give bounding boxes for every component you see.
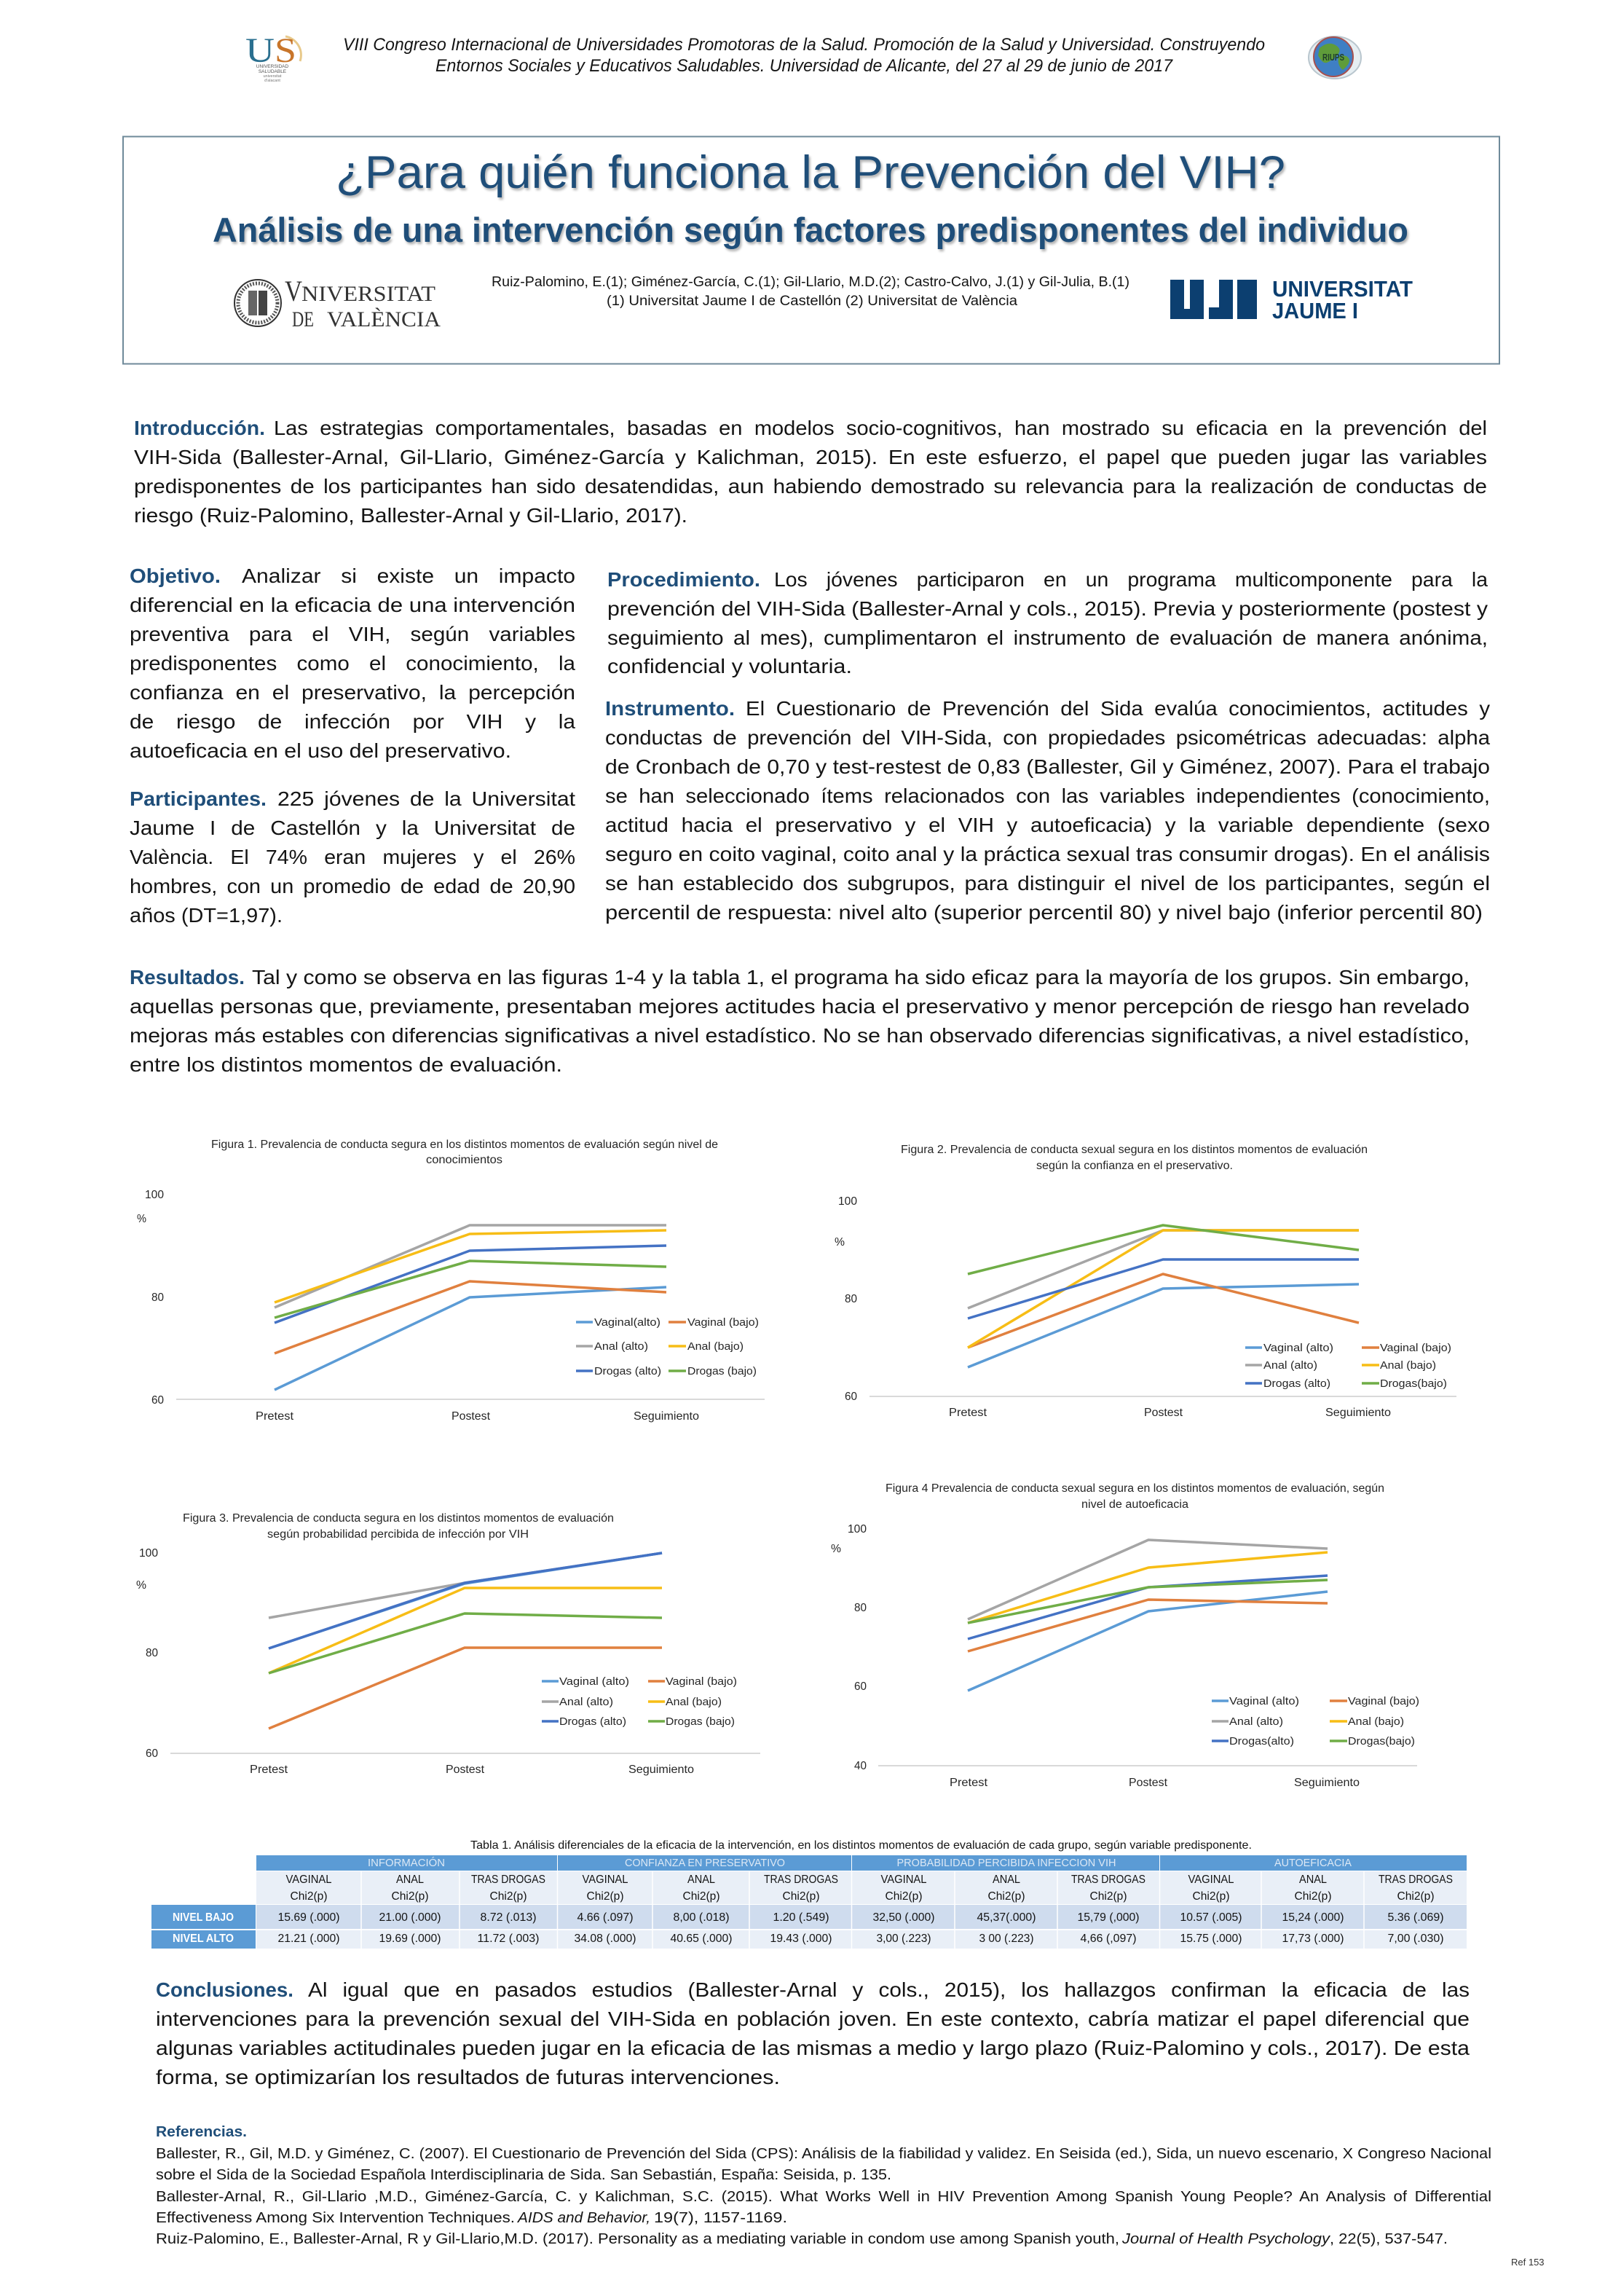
references list: sobre el Sida de la Sociedad Española Interdisciplinaria de Sida. San Sebastián, España: Seisida, p. 135. [156,2167,891,2183]
title: ¿Para quién funciona la Prevención del VIH? [336,147,1285,198]
x axis labels [950,1777,1360,1789]
table column headers: Chi2(p) [1089,1890,1127,1903]
legend: Vaginal (alto) [1263,1342,1333,1354]
table row: nivel bajo: 32,50 (.000) [872,1911,935,1924]
table group headers [368,1857,1352,1869]
x axis labels: Seguimiento [1325,1407,1391,1419]
chart: figura 4 [831,1482,1419,1789]
icon: Universidad Saludable logo [245,31,301,83]
legend: Anal (bajo) [1348,1715,1404,1728]
references list: AIDS and Behavior, [517,2210,650,2226]
table column headers: TRAS DROGAS [471,1874,545,1886]
y axis labels: 60 [854,1680,867,1693]
references list [156,2146,1491,2247]
subtitle: Análisis de una intervención según factores predisponentes del individuo [213,211,1408,249]
text block: conclusiones: Conclusiones. [156,1978,293,2001]
y axis labels: 80 [845,1293,857,1305]
legend: Drogas (alto) [559,1715,626,1728]
text block: resultados: entre los distintos momentos de evaluación. [130,1053,562,1076]
legend: Drogas(alto) [1229,1735,1294,1747]
text block: introducción: Introducción. [134,417,265,439]
text block: objetivo: Analizar si existe un impacto [242,565,575,587]
icon: Universitat de València logo: V [285,275,302,307]
y axis labels: 80 [854,1602,867,1614]
y axis labels [136,1547,158,1760]
text block: resultados: aquellas personas que, previamente, presentaban mejores actitudes hacia el preservativo y menor percepción de riesgo han revelado [130,995,1470,1018]
table row: nivel alto [173,1933,1443,1945]
text block: objetivo: preventiva para el VIH, según variables [130,623,575,645]
icon: Universidad Saludable logo: UNIVERSIDAD [256,64,289,69]
chart: figura 3 [136,1512,760,1776]
table column headers: Chi2(p) [683,1890,719,1903]
chart title [183,1512,614,1541]
table column headers: Chi2(p) [987,1890,1025,1903]
authors: Ruiz-Palomino, E.(1); Giménez-García, C.(1); Gil-Llario, M.D.(2); Castro-Calvo, J.(1) y Gil-Julia, B.(1) [492,275,1129,290]
table caption: Tabla 1. Análisis diferenciales de la eficacia de la intervención, en los distintos momentos de evaluación de cada grupo, según variable predisponente. [470,1839,1252,1852]
text block: introducción: predisponentes de los participantes han sido desatendidas, aun habiendo demostrado su relevancia para la realización de conductas de [134,475,1487,498]
references list: Ballester, R., Gil, M.D. y Giménez, C. (2007). El Cuestionario de Prevención del Sida (CPS): Análisis de la fiabilidad y validez. En Seisida (ed.), Sida, un nuevo escenario, X Congreso Nacional [156,2146,1491,2162]
legend: Drogas (alto) [594,1365,661,1377]
text block: introducción: VIH-Sida (Ballester-Arnal, Gil-Llario, Giménez-García y Kalichman, 2015). En este esfuerzo, el papel que pueden jugar las variables [134,446,1487,468]
table group headers: INFORMACIÓN [368,1857,445,1869]
text block: procedimiento: confidencial y voluntaria. [607,655,852,677]
table row: nivel bajo: 21.00 (.000) [379,1911,441,1924]
y axis labels: % [136,1579,146,1592]
legend: Vaginal (bajo) [687,1316,759,1329]
legend: Drogas(bajo) [1348,1735,1415,1747]
icon: Universitat Jaume I logo [1170,276,1413,323]
chart title: según probabilidad percibida de infección por VIH [267,1528,529,1541]
reference number: Ref 153 [1511,2257,1545,2268]
chart title: Figura 1. Prevalencia de conducta segura en los distintos momentos de evaluación según nivel de [211,1139,718,1151]
x axis labels: Pretest [950,1777,988,1789]
table column headers: ANAL [687,1874,715,1886]
y axis labels: % [831,1543,841,1555]
legend: Anal (alto) [594,1340,648,1353]
x axis labels: Postest [446,1764,485,1776]
table column headers: Chi2(p) [782,1890,820,1903]
text block: procedimiento [607,568,1488,677]
table row: nivel alto: 17,73 (.000) [1282,1933,1344,1945]
references heading: Referencias. [156,2124,247,2140]
text block: instrumento: Instrumento. [605,697,735,720]
text block: objetivo: autoeficacia en el uso del preservativo. [130,739,511,762]
legend: Drogas (bajo) [687,1365,757,1377]
text block: resultados [130,966,1470,1076]
table column headers: ANAL [1299,1874,1327,1886]
x axis labels: Postest [451,1410,491,1423]
text block: participantes: Participantes. [130,787,267,810]
text block: resultados: Tal y como se observa en las figuras 1-4 y la tabla 1, el programa ha sido eficaz para la mayoría de los grupos. Sin embargo, [252,966,1470,988]
chart title: Figura 2. Prevalencia de conducta sexual segura en los distintos momentos de evaluación [901,1144,1368,1156]
references list: Ruiz-Palomino, E., Ballester-Arnal, R y Gil-Llario,M.D. (2017). Personality as a mediating variable in condom use among Spanish youth, [156,2231,1119,2247]
icon: Universidad Saludable logo: universitat [263,74,282,79]
table column headers: Chi2(p) [1295,1890,1331,1903]
chart title: Figura 4 Prevalencia de conducta sexual segura en los distintos momentos de evaluación, según [886,1482,1384,1495]
legend: Anal (alto) [559,1696,613,1708]
x axis labels: Seguimiento [634,1410,699,1423]
text block: instrumento: seguro en coito vaginal, coito anal y la práctica sexual tras consumir drogas). En el análisis [605,843,1490,865]
table row: nivel bajo: 8.72 (.013) [481,1911,536,1924]
text block: introducción: Las estrategias comportamentales, basadas en modelos socio-cognitivos, han mostrado su eficacia en la prevención del [274,417,1487,439]
table row: nivel bajo: 4.66 (.097) [577,1911,634,1924]
table column headers: Chi2(p) [290,1890,328,1903]
references list: Ballester-Arnal, R., Gil-Llario ,M.D., Giménez-García, C. y Kalichman, S.C. (2015). What Works Well in HIV Prevention Among Spanish Young People? An Analysis of Differential [156,2189,1491,2205]
chart: figura 1 [137,1139,765,1423]
legend: Drogas (alto) [1263,1377,1330,1390]
references list: , 22(5), 537-547. [1330,2231,1448,2247]
legend: Anal (bajo) [1380,1359,1436,1372]
table row: nivel alto: 15.75 (.000) [1180,1933,1242,1945]
table row: nivel alto: 3,00 (.223) [877,1933,931,1945]
y axis labels [835,1195,857,1403]
text block: objetivo: diferencial en la eficacia de una intervención [130,594,575,616]
text block: participantes: Jaume I de Castellón y la Universitat de [130,817,575,839]
authors: (1) Universitat Jaume I de Castellón (2) Universitat de València [607,294,1017,309]
text block: introducción: riesgo (Ruiz-Palomino, Ballester-Arnal y Gil-Llario, 2017). [134,504,687,527]
icon: Universidad Saludable logo: SALUDABLE [259,69,287,74]
text block: participantes [130,787,575,927]
icon: Universitat de València logo [234,275,441,331]
legend [542,1675,737,1728]
references list: Journal of Health Psychology [1121,2231,1330,2247]
icon: Universitat de València logo: VALÈNCIA [327,307,441,331]
text block: instrumento: actitud hacia el preservativo y el VIH y autoeficacia) y la variable dependiente (sexo [605,814,1490,836]
table column headers: Chi2(p) [392,1890,428,1903]
icon: Universitat Jaume I logo: UNIVERSITAT [1272,276,1413,302]
legend: Vaginal (bajo) [1380,1342,1451,1354]
y axis labels: 80 [146,1647,158,1659]
text block: instrumento: conductas de prevención del VIH-Sida, con propiedades psicométricas adecuadas: alpha [605,726,1490,749]
text block: procedimiento: Los jóvenes participaron en un programa multicomponente para la [774,568,1488,591]
table column headers: ANAL [396,1874,424,1886]
congress header text [343,35,1265,76]
chart: figura 2 [835,1144,1456,1419]
table column headers: TRAS DROGAS [764,1874,838,1886]
y axis labels: 100 [838,1195,857,1208]
legend [1245,1342,1451,1390]
y axis labels: 100 [848,1523,867,1536]
table row: nivel alto: 7,00 (.030) [1388,1933,1443,1945]
table row: nivel alto: 19.43 (.000) [770,1933,832,1945]
legend: Anal (alto) [1229,1715,1283,1728]
table column headers: VAGINAL [1188,1874,1234,1886]
table row: nivel bajo: 15,24 (.000) [1282,1911,1344,1924]
table row: nivel bajo: 15,79 (,000) [1078,1911,1139,1924]
text block: procedimiento: seguimiento al mes), cumplimentaron el instrumento de evaluación de manera anónima, [607,626,1488,649]
text block: participantes: años (DT=1,97). [130,904,283,927]
legend: Anal (alto) [1263,1359,1317,1372]
table row: nivel alto: 4,66 (,097) [1081,1933,1136,1945]
x axis labels: Pretest [250,1764,288,1776]
table group headers: PROBABILIDAD PERCIBIDA INFECCION VIH [897,1857,1116,1869]
icon: Universitat de València logo: DE [292,307,314,331]
chart title [901,1144,1368,1172]
icon: RIUPS globe logo: RIUPS [1322,52,1344,63]
table column headers [285,1874,1453,1903]
y axis labels: 100 [139,1547,158,1560]
x axis labels [250,1764,694,1776]
table column headers: Chi2(p) [489,1890,527,1903]
text block: procedimiento: Procedimiento. [607,568,760,591]
text block: instrumento: se han establecido dos subgrupos, para distinguir el nivel de los participantes, según el [605,872,1490,895]
y axis labels: 100 [145,1189,164,1201]
table group headers: CONFIANZA EN PRESERVATIVO [625,1857,785,1869]
x axis labels [256,1410,699,1423]
legend: Vaginal(alto) [594,1316,660,1329]
table row: nivel alto: 19.69 (.000) [379,1933,441,1945]
text block: instrumento: El Cuestionario de Prevención del Sida evalúa conocimientos, actitudes y [746,697,1490,720]
legend: Vaginal (alto) [1229,1695,1299,1707]
text block: resultados: mejoras más estables con diferencias significativas a nivel estadístico. No se han observado diferencias significativas, a nivel estadístico, [130,1024,1470,1047]
table column headers: Chi2(p) [1397,1890,1435,1903]
y axis labels: 60 [151,1394,164,1407]
table row: nivel bajo: 5.36 (.069) [1388,1911,1443,1924]
text block: instrumento: se han seleccionado ítems relacionados con las variables independientes (conocimiento, [605,785,1490,807]
text block: conclusiones: intervenciones para la prevención sexual del VIH-Sida en población joven. En este contexto, cabría matizar el papel diferencial que [156,2008,1470,2030]
text block: objetivo: confianza en el preservativo, la percepción [130,681,575,704]
chart title: conocimientos [426,1154,502,1166]
table row: nivel alto: NIVEL ALTO [173,1933,234,1945]
chart title: nivel de autoeficacia [1081,1498,1188,1511]
references list: 19(7), 1157-1169. [654,2210,787,2226]
chart title [211,1139,718,1166]
congress header text: Entornos Sociales y Educativos Saludables. Universidad de Alicante, del 27 al 29 de junio de 2017 [435,56,1174,76]
text block: participantes: València. El 74% eran mujeres y el 26% [130,846,575,868]
text block: objetivo: predisponentes como el conocimiento, la [130,652,575,675]
table row: nivel bajo: 8,00 (.018) [673,1911,730,1924]
table 1 [151,1855,1467,1949]
panel: title box [123,137,1499,364]
references list: Effectiveness Among Six Intervention Techniques. [156,2210,515,2226]
data lines [968,1225,1359,1367]
y axis labels: 80 [151,1292,164,1304]
icon: Universitat Jaume I logo: JAUME I [1272,298,1358,323]
x axis labels: Postest [1129,1777,1168,1789]
text block: objetivo [130,565,575,762]
table row: nivel alto: 40.65 (.000) [670,1933,733,1945]
table column headers: Chi2(p) [587,1890,623,1903]
data lines [275,1225,666,1390]
table row: nivel bajo: 15.69 (.000) [278,1911,339,1924]
table row: nivel alto: 21.21 (.000) [278,1933,339,1945]
table row: nivel alto: 11.72 (.003) [478,1933,539,1945]
y axis labels: % [835,1236,845,1249]
y axis labels: 60 [845,1391,857,1403]
chart title: según la confianza en el preservativo. [1036,1160,1233,1172]
y axis labels [137,1189,164,1407]
x axis labels: Pretest [256,1410,294,1423]
table column headers: TRAS DROGAS [1071,1874,1145,1886]
text block: introducción [134,417,1487,527]
legend: Anal (bajo) [666,1696,722,1708]
text block: conclusiones [156,1978,1470,2088]
x axis labels: Postest [1144,1407,1183,1419]
text block: participantes: hombres, con un promedio de edad de 20,90 [130,875,575,897]
legend: Vaginal (bajo) [666,1675,737,1688]
icon: Universitat de València logo: NIVERSITAT [301,282,435,306]
x axis labels: Seguimiento [1294,1777,1360,1789]
text block: procedimiento: prevención del VIH-Sida (Ballester-Arnal y cols., 2015). Previa y posteriormente (postest y [607,597,1488,620]
table column headers: TRAS DROGAS [1379,1874,1453,1886]
authors [492,275,1129,309]
x axis labels: Pretest [949,1407,987,1419]
table row: nivel bajo: 45,37(.000) [977,1911,1036,1924]
x axis labels: Seguimiento [628,1764,694,1776]
y axis labels: 60 [146,1747,158,1760]
congress header text: VIII Congreso Internacional de Universidades Promotoras de la Salud. Promoción de la Salud y Universidad. Construyendo [343,35,1265,55]
icon: Universidad Saludable logo: d'alacant [264,79,280,83]
text block: conclusiones: forma, se optimizarían los resultados de futuras intervenciones. [156,2066,780,2088]
table row: nivel alto: 34.08 (.000) [574,1933,636,1945]
table group headers: AUTOEFICACIA [1274,1857,1352,1869]
text block: resultados: Resultados. [130,966,245,988]
text block: instrumento [605,697,1490,924]
table column headers: VAGINAL [285,1874,332,1886]
legend: Anal (bajo) [687,1340,744,1353]
legend [576,1316,759,1377]
icon: Universidad Saludable logo: U [245,31,275,70]
table row: nivel bajo: 1.20 (.549) [773,1911,829,1924]
data lines [269,1553,662,1729]
x axis labels [949,1407,1391,1419]
text block: instrumento: percentil de respuesta: nivel alto (superior percentil 80) y nivel bajo (inferior percentil 80) [605,901,1483,924]
table row: nivel alto: 3 00 (.223) [979,1933,1034,1945]
text block: objetivo: de riesgo de infección por VIH y la [130,710,575,733]
legend: Drogas (bajo) [666,1715,735,1728]
text block: objetivo: Objetivo. [130,565,221,587]
table row: nivel bajo: 10.57 (.005) [1180,1911,1242,1924]
chart title [886,1482,1384,1511]
text block: instrumento: de Cronbach de 0,70 y test-restest de 0,83 (Ballester, Gil y Giménez, 2007). Para el trabajo [605,755,1490,778]
table column headers: Chi2(p) [886,1890,922,1903]
y axis labels: 40 [854,1760,867,1772]
text block: conclusiones: Al igual que en pasados estudios (Ballester-Arnal y cols., 2015), los hallazgos confirman la eficacia de las [308,1978,1470,2001]
table row: nivel bajo: NIVEL BAJO [173,1911,234,1924]
icon: RIUPS globe logo [1309,36,1361,79]
legend: Drogas(bajo) [1380,1377,1447,1390]
y axis labels [831,1523,867,1772]
icon: Universidad Saludable logo: S [275,31,296,70]
text block: participantes: 225 jóvenes de la Universitat [277,787,575,810]
legend: Vaginal (bajo) [1348,1695,1419,1707]
table column headers: ANAL [993,1874,1020,1886]
data lines [968,1540,1328,1691]
y axis labels: % [137,1213,146,1225]
table column headers: VAGINAL [583,1874,628,1886]
table column headers: Chi2(p) [1193,1890,1229,1903]
text block: referencias [156,2124,1491,2247]
chart title: Figura 3. Prevalencia de conducta segura en los distintos momentos de evaluación [183,1512,614,1525]
table column headers: VAGINAL [881,1874,927,1886]
table row: nivel bajo [173,1911,1443,1924]
legend [1212,1695,1419,1747]
legend: Vaginal (alto) [559,1675,629,1688]
text block: conclusiones: algunas variables actitudinales pueden jugar en la eficacia de las mismas a medio y largo plazo (Ruiz-Palomino y cols., 2017). De esta [156,2037,1470,2059]
